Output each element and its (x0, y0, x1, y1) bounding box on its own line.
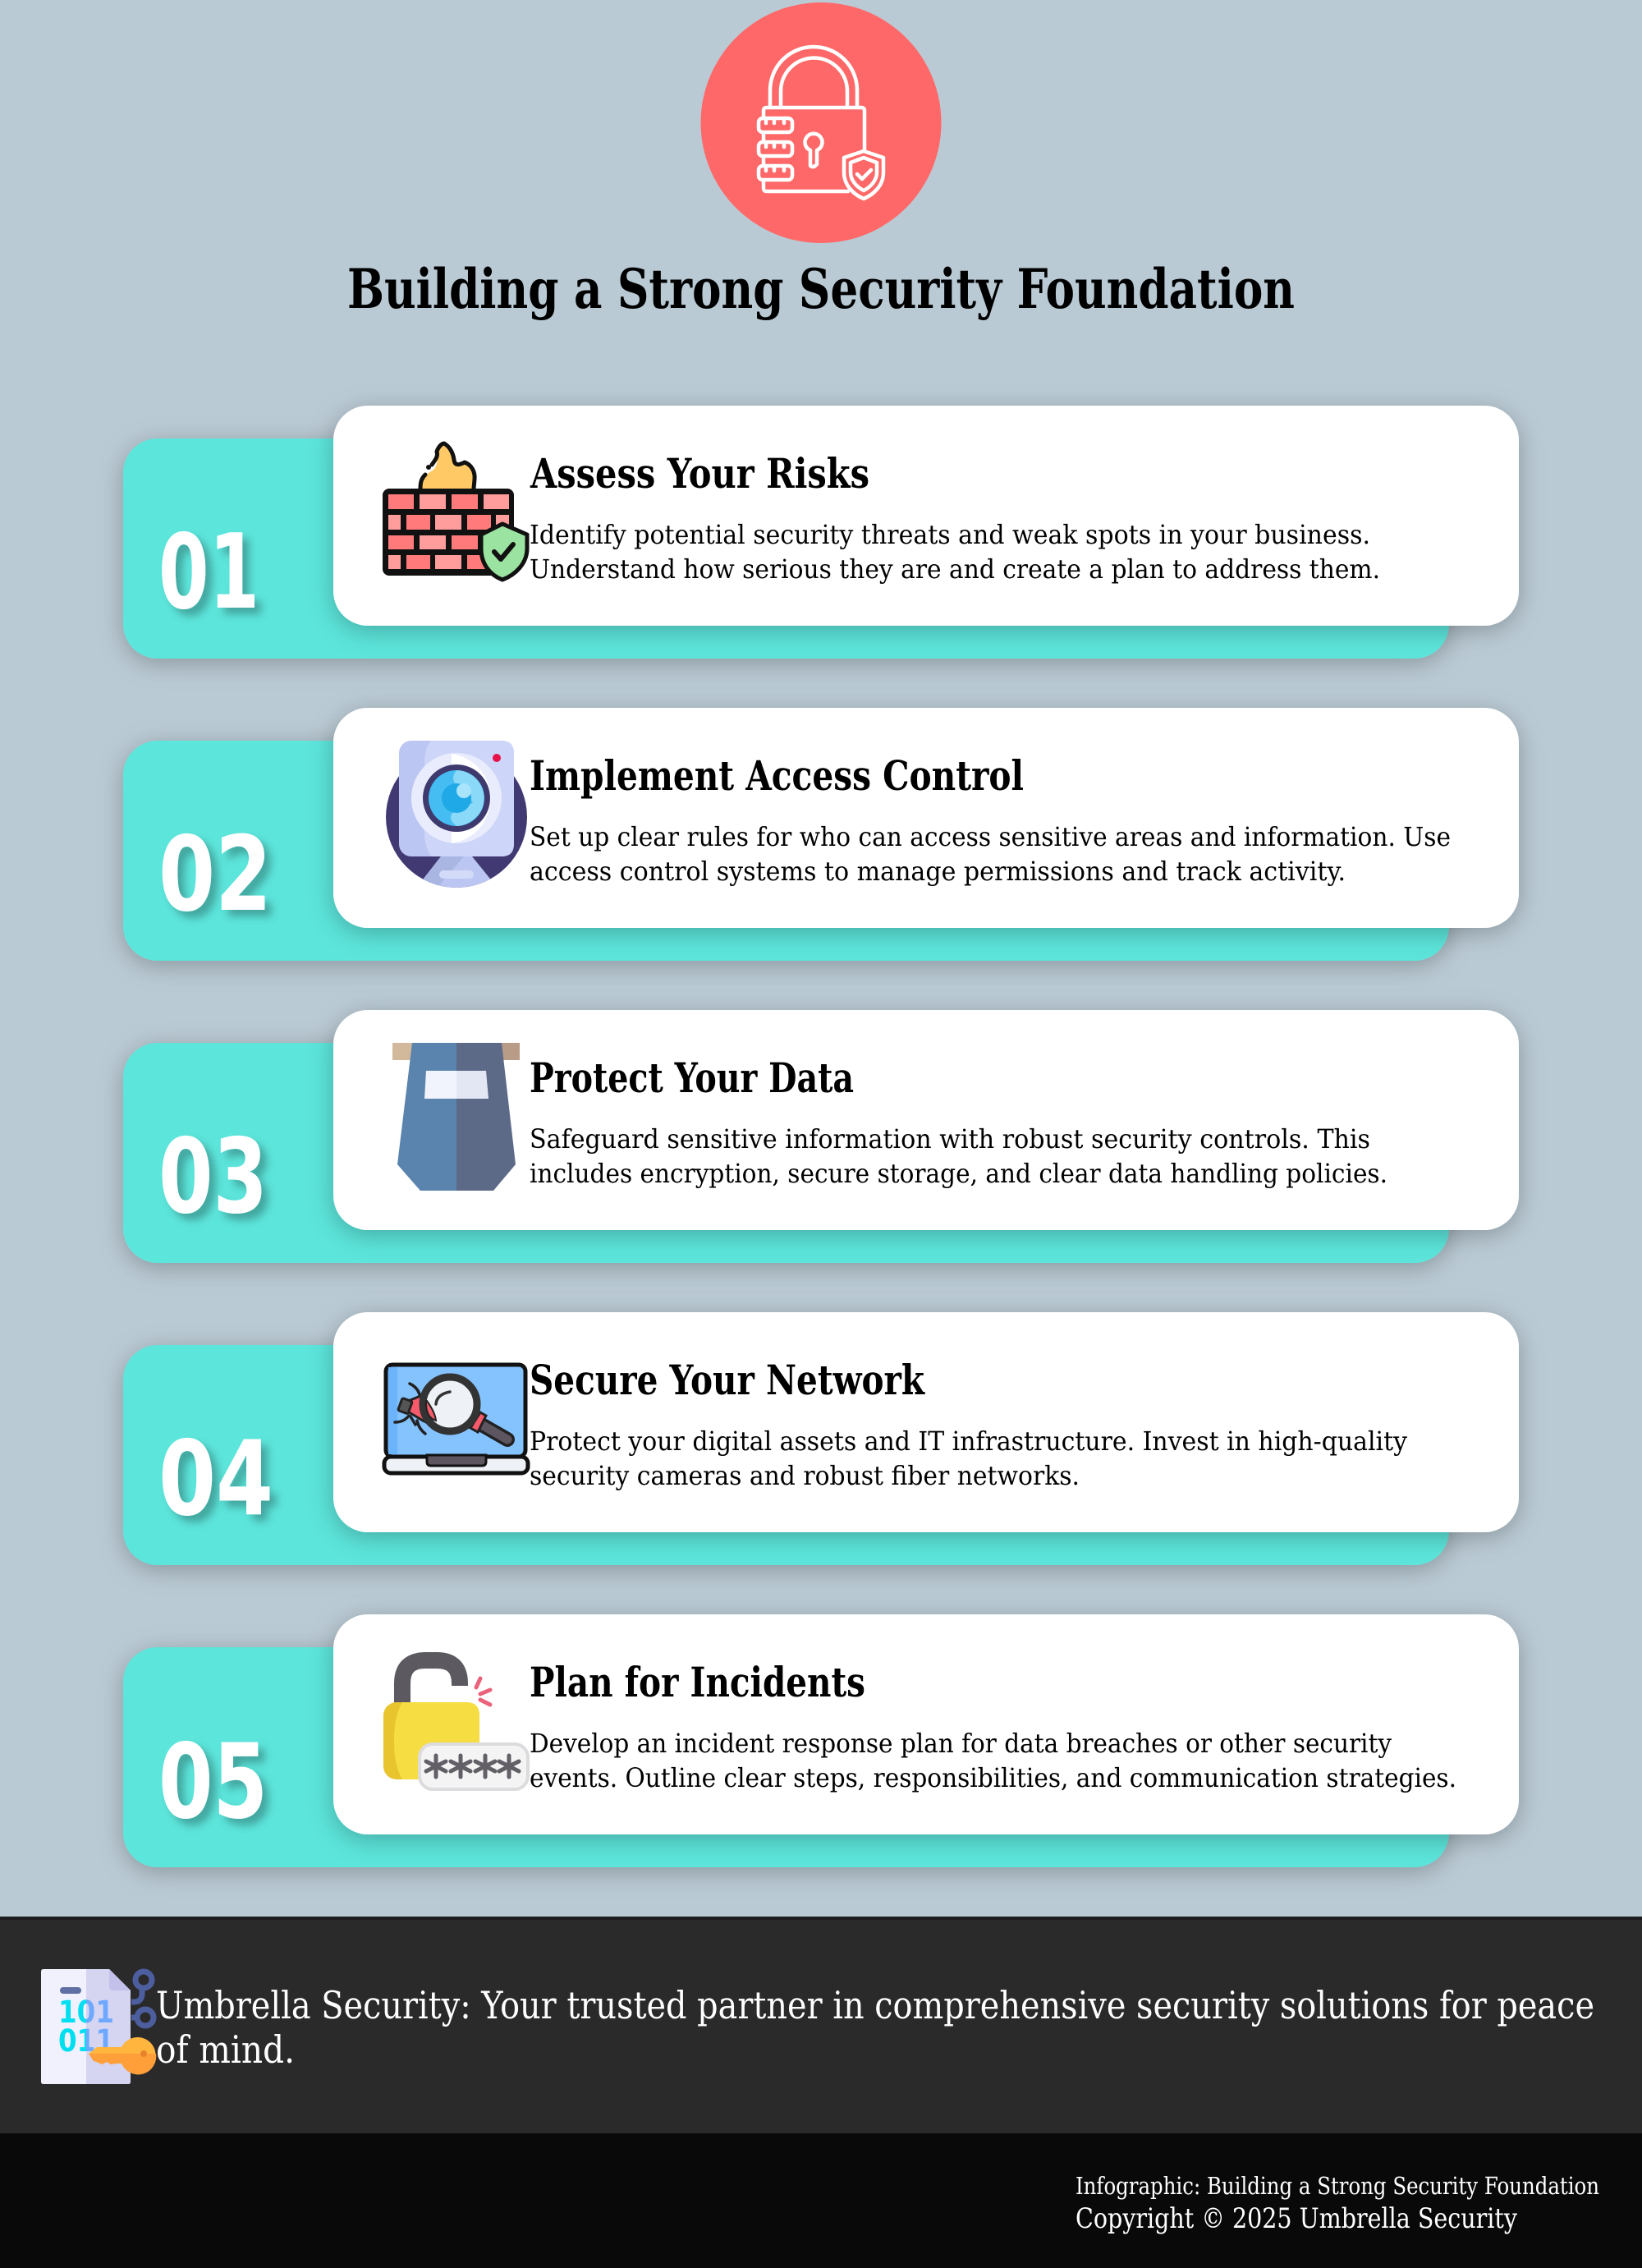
white content card 01 (333, 406, 1519, 626)
white content card 03 (333, 1010, 1519, 1230)
description: secure your network: security cameras and robust fiber networks. (530, 1460, 1080, 1491)
icon: brick firewall with flame and shield (384, 443, 527, 580)
white content card 05 (333, 1614, 1519, 1834)
tagline text (156, 1983, 1594, 2072)
number 05: 05 (158, 1721, 268, 1842)
heading: assess your risks: Assess Your Risks (530, 449, 869, 498)
description: plan for incidents: events. Outline clear steps, responsibilities, and communication strategies. (530, 1762, 1456, 1793)
panel: tagline band (0, 1917, 1642, 2133)
panel: step 04 (123, 1312, 1519, 1565)
icon: encrypted file with key (41, 1969, 156, 2084)
icon: data tag (392, 1043, 520, 1191)
icon: encrypted file with key: 101 (58, 1995, 114, 2030)
icon: security camera (386, 741, 527, 895)
description: assess your risks (530, 519, 1380, 585)
teal number card 02 (123, 741, 1449, 961)
heading: secure your network: Secure Your Network (530, 1356, 925, 1404)
icon: open lock with password field (383, 1660, 528, 1789)
teal number card 04 (123, 1345, 1449, 1565)
tagline text: of mind. (156, 2027, 295, 2072)
white content card 02 (333, 708, 1519, 928)
panel: step 03 (123, 1010, 1519, 1263)
number 03: 03 (158, 1116, 268, 1237)
description: plan for incidents: Develop an incident response plan for data breaches or other security (530, 1728, 1392, 1759)
number 01: 01 (158, 512, 259, 632)
heading: implement access control: Implement Access Control (530, 751, 1024, 800)
number 04: 04 (158, 1418, 273, 1539)
description: protect your data: Safeguard sensitive information with robust security controls. This (530, 1123, 1370, 1155)
panel: copyright footer (0, 2133, 1642, 2268)
description: protect your data (530, 1123, 1387, 1189)
heading: protect your data: Protect Your Data (530, 1054, 854, 1102)
description: assess your risks: Identify potential security threats and weak spots in your business. (530, 519, 1370, 550)
description: implement access control (530, 821, 1451, 887)
icon: encrypted file with key: 011 (58, 2023, 114, 2059)
teal number card 05 (123, 1647, 1449, 1867)
teal number card 03 (123, 1043, 1449, 1263)
panel: step 05 (123, 1614, 1519, 1867)
white content card 04 (333, 1312, 1519, 1532)
description: implement access control: access control systems to manage permissions and track activity. (530, 856, 1346, 887)
title: Building a Strong Security Foundation (347, 257, 1295, 321)
number 02: 02 (158, 814, 272, 934)
description: secure your network (530, 1426, 1407, 1491)
heading: plan for incidents: Plan for Incidents (530, 1658, 865, 1706)
description: protect your data: includes encryption, secure storage, and clear data handling policies. (530, 1158, 1387, 1189)
panel: step 02 (123, 708, 1519, 961)
icon: padlock in coral circle (701, 2, 941, 243)
icon: encrypted file with key: 101 (58, 1995, 114, 2030)
teal number card 01 (123, 438, 1449, 659)
icon: encrypted file with key: 011 (58, 2023, 114, 2059)
description: plan for incidents (530, 1728, 1456, 1793)
copyright line: Copyright © 2025 Umbrella Security (1076, 2202, 1518, 2235)
description: secure your network: Protect your digital assets and IT infrastructure. Invest in high-quality (530, 1426, 1407, 1457)
description: assess your risks: Understand how serious they are and create a plan to address them. (530, 553, 1380, 585)
icon: laptop with magnifier and bug (384, 1365, 528, 1473)
panel: step 01 (123, 406, 1519, 659)
description: implement access control: Set up clear rules for who can access sensitive areas and information. Use (530, 821, 1451, 852)
